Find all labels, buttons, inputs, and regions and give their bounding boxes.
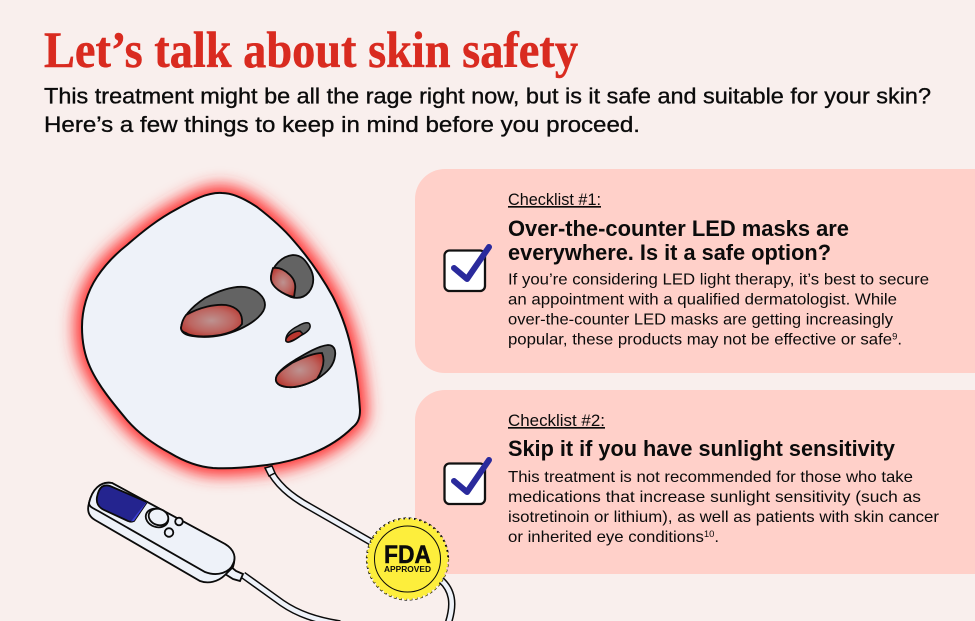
checklist 2 heading: Skip it if you have sunlight sensitivity: [508, 436, 896, 461]
remote screen highlight: [131, 502, 147, 522]
remote screen: [97, 485, 147, 522]
intro text: This treatment might be all the rage right now, but is it safe and suitable for your skin?: [44, 84, 931, 108]
badge: FDA approved: APPROVED: [384, 565, 431, 574]
mouth opening: [276, 345, 335, 387]
checklist 1 body: 9: [892, 332, 897, 342]
illustration: LED mask: [82, 193, 452, 621]
checklist 1 heading: [508, 216, 849, 265]
checklist 2 body: medications that increase sunlight sensitivity (such as: [508, 489, 921, 506]
checklist 1 body: If you’re considering LED light therapy, it’s best to secure: [508, 272, 929, 289]
panel: checklist 1: [415, 169, 975, 373]
checklist 1 label: Checklist #1:: [508, 191, 601, 209]
checklist 2 body: 10: [704, 529, 714, 539]
intro text: [44, 84, 931, 137]
badge: FDA approved: FDA: [384, 541, 431, 569]
checklist 1 body: .: [897, 332, 902, 349]
checklist 2 label: Checklist #2:: [508, 412, 605, 430]
cable: remote: [243, 575, 340, 621]
checklist 1 body: [508, 272, 929, 349]
mask glow: [82, 193, 360, 468]
checklist 2 body: [508, 469, 940, 546]
checklist 1 heading: Over-the-counter LED masks are: [508, 216, 849, 241]
checklist 2 body: isotretinoin or lithium), as well as patients with skin cancer: [508, 509, 940, 526]
badge: FDA approved: [367, 519, 448, 599]
right eye opening: [271, 255, 313, 298]
checklist 1 body: over-the-counter LED masks are getting increasingly: [508, 312, 893, 329]
panel: checklist 2: [415, 390, 975, 574]
left eye opening: [181, 287, 265, 337]
cable: mask to badge: [265, 466, 452, 621]
icon: checkbox 1: [444, 247, 489, 291]
icon: checkbox 2: [444, 460, 489, 504]
checklist 2 body: or inherited eye conditions: [508, 529, 695, 546]
intro text: Here’s a few things to keep in mind before you proceed.: [44, 112, 640, 137]
checklist 1 heading: everywhere. Is it a safe option?: [508, 240, 831, 265]
checklist 2 body: .: [714, 529, 719, 546]
remote buttons: [143, 506, 183, 537]
title: Let’s talk about skin safety: [44, 23, 578, 79]
illustration: remote control: [88, 483, 243, 582]
checklist 1 body: popular, these products may not be effective or safe: [508, 332, 875, 349]
checklist 2 body: This treatment is not recommended for those who take: [508, 469, 913, 486]
mask face: [82, 193, 360, 468]
checklist 1 body: an appointment with a qualified dermatologist. While: [508, 292, 897, 309]
nose opening: [286, 323, 310, 342]
